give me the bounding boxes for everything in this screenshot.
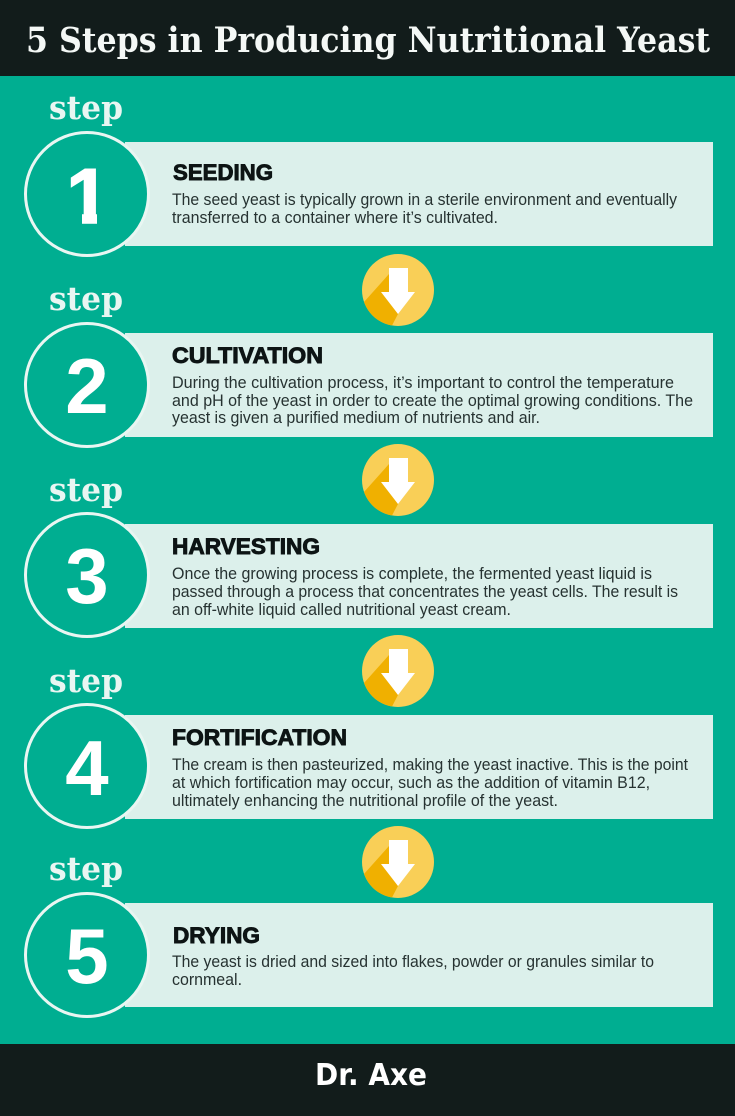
panel: step 1 seeding	[26, 88, 713, 256]
step 2 label: step	[49, 279, 123, 318]
step 5 body text: cornmeal.	[172, 971, 242, 989]
panel: step 3 harvesting	[26, 470, 713, 636]
step 1 body text: The seed yeast is typically grown in a sterile environment and eventually	[172, 191, 678, 209]
footer: Dr. Axe logo	[0, 1044, 735, 1116]
icon: arrow 2	[362, 444, 434, 516]
step 5 heading: DRYING	[173, 923, 260, 948]
step 3 number badge: 3	[65, 532, 109, 620]
step 3 body text: an off-white liquid called nutritional yeast cream.	[172, 601, 511, 619]
step 4 heading: FORTIFICATION	[172, 725, 347, 750]
step 1 body text	[172, 191, 678, 227]
step 3 label: step	[49, 470, 123, 509]
step 5 number badge	[26, 894, 148, 1016]
step 1 number badge: 1	[66, 152, 110, 240]
step 3 number badge	[26, 514, 148, 636]
step 4 number badge: 4	[65, 724, 109, 812]
step 1 label: step	[49, 88, 123, 127]
step 3 body text: passed through a process that concentrates the yeast cells. The result is	[172, 583, 678, 601]
step 1 number badge	[26, 132, 148, 256]
step 2 number badge: 2	[65, 342, 109, 430]
panel: step 5 drying	[26, 849, 713, 1016]
step 5 label: step	[49, 849, 123, 888]
step 2 body text: yeast is given a purified medium of nutrients and air.	[172, 409, 540, 427]
step 4 body text: The cream is then pasteurized, making the yeast inactive. This is the point	[172, 756, 688, 774]
step 4 body text: at which fortification may occur, such as the addition of vitamin B12,	[172, 774, 650, 792]
step 2 number badge	[26, 324, 148, 446]
step 2 body text: During the cultivation process, it’s important to control the temperature	[172, 374, 674, 392]
step 3 body text	[172, 565, 678, 619]
icon: arrow 3	[362, 635, 434, 707]
step 5 body text	[172, 953, 654, 989]
step 4 number badge	[26, 704, 148, 828]
step 4 label: step	[49, 661, 123, 700]
panel: step 4 fortification	[26, 661, 713, 828]
footer: Dr. Axe logo: Dr. Axe	[315, 1058, 427, 1093]
step 2 heading: CULTIVATION	[172, 343, 323, 368]
step 4 body text: ultimately enhancing the nutritional profile of the yeast.	[172, 792, 558, 810]
step 3 body text: Once the growing process is complete, the fermented yeast liquid is	[172, 565, 652, 583]
step 5 body text: The yeast is dried and sized into flakes, powder or granules similar to	[172, 953, 654, 971]
step 2 body text: and pH of the yeast in order to create the optimal growing conditions. The	[172, 392, 693, 410]
step 1 heading: SEEDING	[173, 160, 273, 185]
panel: step 2 cultivation	[26, 279, 713, 446]
icon: arrow 1	[362, 254, 434, 326]
step 4 body text	[172, 756, 688, 810]
step 3 heading: HARVESTING	[172, 534, 320, 559]
step 1 body text: transferred to a container where it’s cultivated.	[172, 209, 498, 227]
icon: arrow 4	[362, 826, 434, 898]
step 2 body text	[172, 374, 693, 427]
title banner	[0, 0, 735, 76]
step 5 number badge: 5	[65, 912, 109, 1000]
